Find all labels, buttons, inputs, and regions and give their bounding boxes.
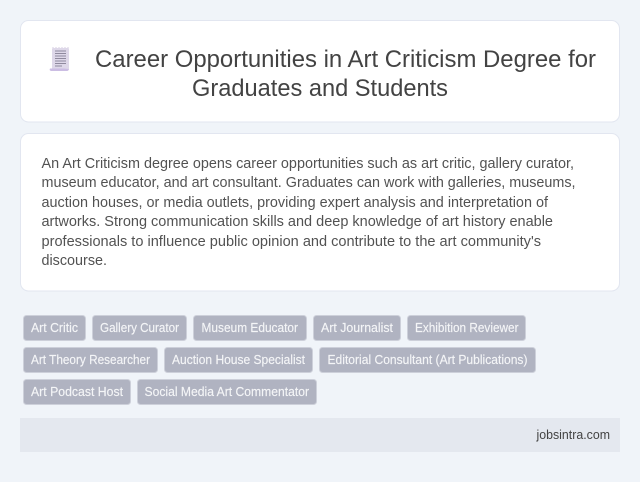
- description text: artworks. Strong communication skills and deep knowledge of art history enable: [42, 213, 553, 230]
- tag: Exhibition Reviewer: Exhibition Reviewer: [415, 320, 519, 335]
- description text: [42, 155, 576, 269]
- tag: Art Critic: [24, 316, 86, 340]
- tag: Editorial Consultant: [320, 348, 536, 372]
- footer bar: [20, 418, 620, 452]
- tag: Art Theory Researcher: [24, 348, 158, 372]
- tag: Gallery Curator: [92, 316, 186, 340]
- panel: description card: [20, 134, 620, 291]
- tag: Art Podcast Host: Art Podcast Host: [31, 384, 123, 399]
- panel: header card: [20, 20, 620, 122]
- tag: Art Theory Researcher: Art Theory Researcher: [31, 352, 151, 367]
- tag: Auction House Specialist: [164, 348, 312, 372]
- tag: Auction House Specialist: Auction House Specialist: [172, 352, 305, 367]
- footer site name: jobsintra.com: [536, 427, 610, 442]
- tag: Art Podcast Host: [24, 380, 130, 404]
- tag: Editorial Consultant: Editorial Consultant (Art Publications): [328, 352, 528, 367]
- icon: document scroll: [50, 48, 69, 71]
- tag: Art Journalist: Art Journalist: [321, 320, 393, 335]
- description text: discourse.: [42, 252, 107, 269]
- tag: Social Media Art Commentator: Social Media Art Commentator: [144, 384, 310, 399]
- description text: An Art Criticism degree opens career opportunities such as art critic, gallery curator,: [42, 155, 574, 172]
- tag: Exhibition Reviewer: [408, 316, 526, 340]
- description text: museum educator, and art consultant. Graduates can work with galleries, museums,: [42, 174, 576, 191]
- tag: Museum Educator: Museum Educator: [202, 320, 299, 335]
- tag: Gallery Curator: Gallery Curator: [100, 320, 180, 335]
- title: Career Opportunities in Art Criticism Degree for: [95, 46, 596, 73]
- career tags: [24, 316, 536, 404]
- description text: professionals to influence public opinion and contribute to the art community's: [42, 233, 541, 250]
- tag: Museum Educator: [194, 316, 306, 340]
- title: Graduates and Students: [192, 75, 448, 102]
- tag: Art Journalist: [314, 316, 400, 340]
- tag: Social Media Art Commentator: [138, 380, 316, 404]
- tag: Art Critic: Art Critic: [31, 320, 79, 335]
- title: [95, 46, 596, 102]
- description text: auction houses, or media outlets, providing expert analysis and interpretation of: [42, 194, 549, 211]
